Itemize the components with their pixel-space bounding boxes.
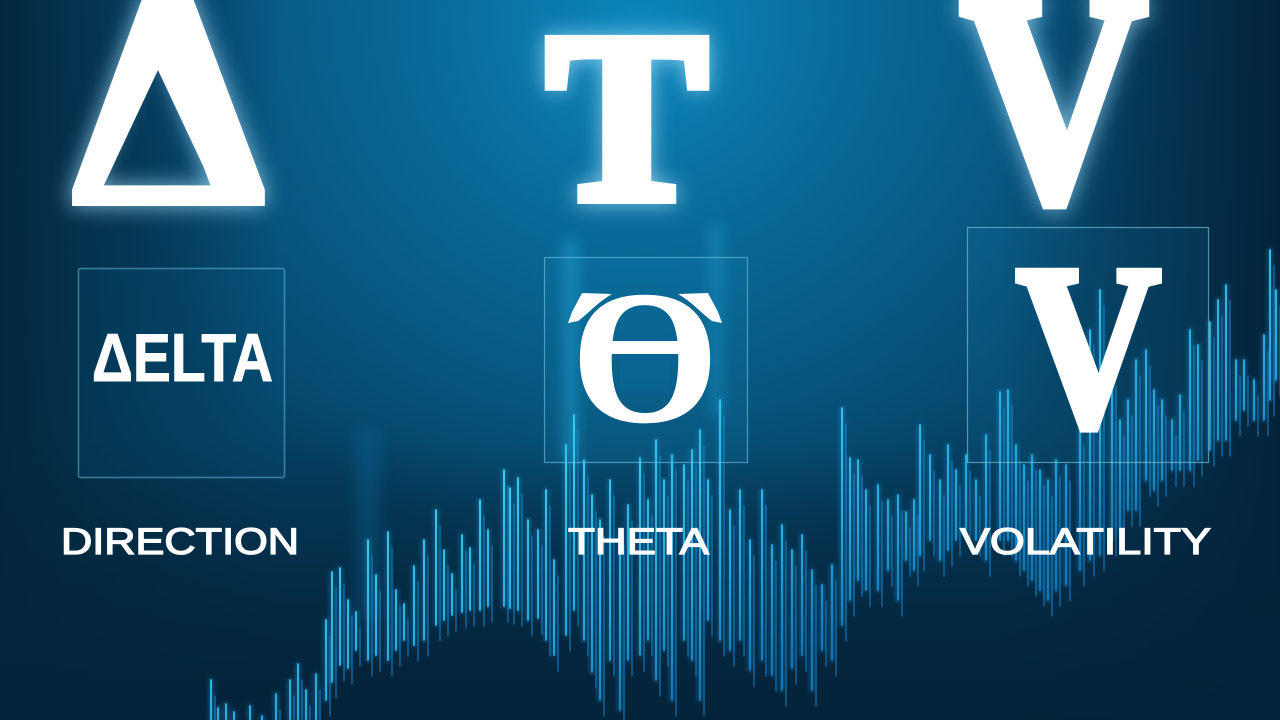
label: volatility: VOLATILITY xyxy=(960,521,1211,562)
price chart spikes xyxy=(211,250,1280,720)
panel: volatility box xyxy=(968,218,1208,477)
label: direction: DIRECTION xyxy=(61,521,299,562)
volatility V symbol: V xyxy=(1016,218,1161,477)
panel: theta box xyxy=(544,253,748,463)
theta symbol: Θ xyxy=(571,253,719,463)
label: theta: THETA xyxy=(568,521,709,562)
panel: delta box xyxy=(78,268,284,478)
delta wordmark: ΔELTA xyxy=(92,320,273,396)
